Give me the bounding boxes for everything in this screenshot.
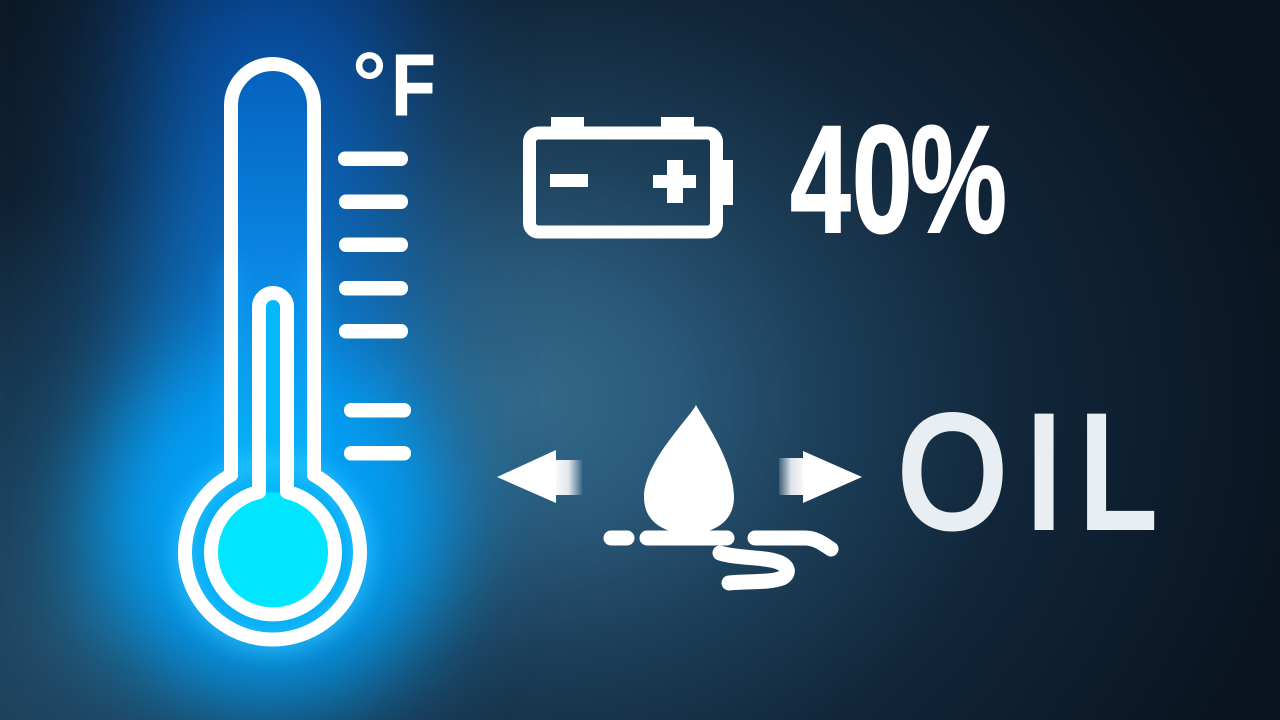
right arrow bbox=[779, 451, 862, 503]
unit label: degrees Fahrenheit bbox=[352, 35, 436, 134]
thermometer inner outline bbox=[211, 293, 335, 614]
oil puddle strokes bbox=[611, 538, 831, 583]
unit label: degrees Fahrenheit: F bbox=[392, 37, 436, 134]
battery terminals bbox=[551, 117, 733, 205]
icon: battery bbox=[530, 117, 733, 232]
battery minus sign bbox=[550, 174, 588, 187]
unit label: degrees Fahrenheit: ° bbox=[352, 35, 387, 132]
thermometer stem mercury bbox=[259, 293, 287, 500]
thermometer mercury bulb bbox=[212, 492, 332, 612]
thermometer blue glow bbox=[97, 0, 447, 705]
thermometer glow halo bbox=[182, 260, 362, 642]
oil drop bbox=[644, 405, 734, 535]
icon: oil leak bbox=[497, 405, 862, 583]
battery percentage: 40% bbox=[790, 95, 1007, 265]
left arrow bbox=[497, 450, 582, 503]
battery plus sign bbox=[653, 160, 696, 203]
thermometer bulb interior bbox=[186, 466, 360, 640]
icon: thermometer bbox=[182, 64, 362, 642]
thermometer outer outline bbox=[185, 64, 360, 640]
temperature scale ticks bbox=[338, 152, 411, 460]
battery body bbox=[530, 133, 716, 232]
oil label: OIL bbox=[899, 382, 1156, 561]
thermometer tube interior bbox=[231, 64, 314, 480]
